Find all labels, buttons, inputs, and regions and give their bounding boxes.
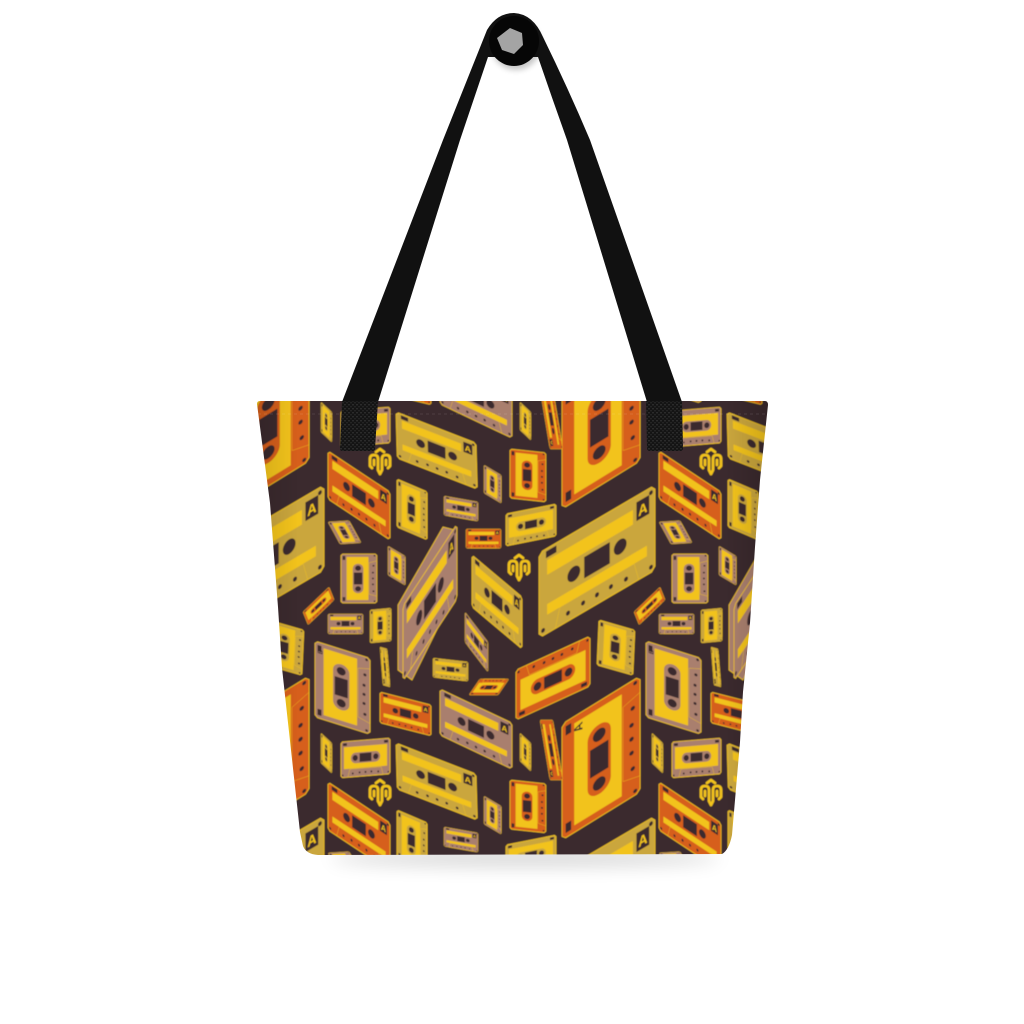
cassette: small mauve xyxy=(444,496,478,521)
cassette: tiny orange skewed xyxy=(303,587,334,625)
cassette: small orange xyxy=(466,529,501,548)
cassette: large mauve upright xyxy=(315,641,370,734)
cassette: mustard upright xyxy=(397,479,427,540)
peg shadow xyxy=(491,20,541,70)
cassette: thin mustard centre xyxy=(520,402,531,440)
cassette: small mauve upright 2 xyxy=(388,546,405,585)
cassette: thin mustard left xyxy=(321,402,332,442)
tote bag body with cassette pattern xyxy=(257,401,768,855)
cassette: mustard slanted xyxy=(472,555,522,649)
cassette: big mustard xyxy=(539,485,655,638)
cassette: mustard upright 2 xyxy=(597,620,635,675)
cassette: small mustard upright xyxy=(370,608,391,643)
edge shading xyxy=(257,401,768,762)
logo mark left xyxy=(370,449,390,474)
pattern tile of cassettes xyxy=(303,345,655,736)
strap loop xyxy=(342,13,682,402)
softened print layer xyxy=(257,401,768,855)
right strap patch xyxy=(646,401,683,451)
peg xyxy=(489,16,539,66)
cassette: small mauve upright xyxy=(484,465,501,503)
cassette: orange striped xyxy=(328,451,390,540)
cassette: thin mauve slanted xyxy=(465,612,488,672)
cassette: thin orange xyxy=(540,389,563,449)
cassette: mustard flat xyxy=(506,504,556,546)
cassette: tiny mauve skewed xyxy=(328,521,361,544)
cassette: small mustard flat xyxy=(433,658,468,681)
cassette: small mauve flat xyxy=(328,614,363,634)
cassette: large mauve upright: B xyxy=(318,649,325,655)
cassette: mustard striped xyxy=(396,412,477,489)
cassette: mauve striped xyxy=(440,358,512,438)
cassette: orange striped flat xyxy=(380,692,431,736)
left strap patch xyxy=(340,401,378,451)
bag background xyxy=(250,395,775,860)
cassette: tiny orange flat xyxy=(469,679,509,695)
cassette: big orange: A xyxy=(572,388,586,405)
cassette: big orange xyxy=(562,345,640,509)
logo mark centre xyxy=(509,555,529,580)
cassette: mauve upright xyxy=(341,554,377,603)
cassette: wide orange xyxy=(516,636,590,720)
cassette: large mauve slanted xyxy=(398,524,457,681)
cassette: thin mustard sliver xyxy=(380,647,390,687)
cassette: orange upright xyxy=(510,449,546,502)
ground shadow xyxy=(330,850,720,866)
cassette: mauve flat under strap xyxy=(341,407,390,447)
